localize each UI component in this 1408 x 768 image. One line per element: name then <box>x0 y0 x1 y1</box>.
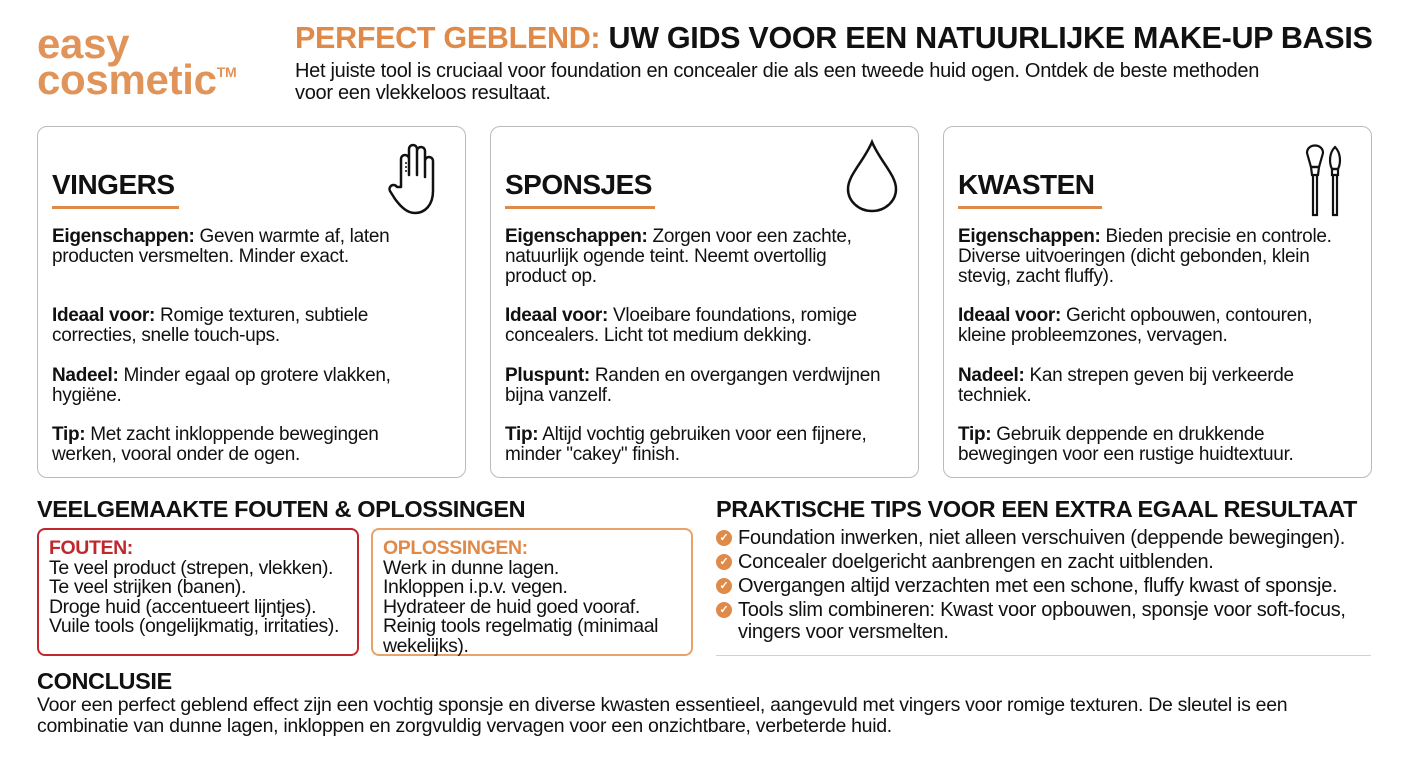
heading: VINGERS <box>52 169 175 200</box>
box: oplossingen: Werk in dunne lagen. <box>383 556 559 578</box>
subtitle <box>295 60 1259 104</box>
heading: KWASTEN <box>958 169 1094 200</box>
logo: easy <box>37 20 129 67</box>
tips list: Foundation inwerken, niet alleen verschuiven (deppende bewegingen). <box>738 527 1345 549</box>
conclusie heading: CONCLUSIE <box>37 668 172 694</box>
tips list: Overgangen altijd verzachten met een schone, fluffy kwast of sponsje. <box>738 575 1337 597</box>
subtitle: Het juiste tool is cruciaal voor foundation en concealer die als een tweede huid ogen. Ontdek de beste methoden <box>295 60 1259 82</box>
box: fouten: Droge huid (accentueert lijntjes). <box>49 596 316 618</box>
panel: sponsjes: Tip: Altijd vochtig gebruiken voor een fijnere, minder "cakey" finish. <box>505 424 867 465</box>
panel: kwasten: Ideaal voor: Gericht opbouwen, contouren, kleine probleemzones, vervagen. <box>958 305 1312 346</box>
box: fouten: Te veel strijken (banen). <box>49 576 246 598</box>
tips list <box>716 527 1346 643</box>
box: oplossingen: Hydrateer de huid goed vooraf. <box>383 596 640 618</box>
conclusie text: Voor een perfect geblend effect zijn een vochtig sponsje en diverse kwasten essentieel, aangevuld met vingers voor romige texturen. De sleutel is een combinatie van dunne lagen, inkloppen en zorgvuldig vervagen voor een onzichtbare, verbeterde huid. <box>37 694 1287 737</box>
icon: drop <box>846 139 898 212</box>
heading: praktische tips: PRAKTISCHE TIPS VOOR EEN EXTRA EGAAL RESULTAAT <box>716 496 1357 522</box>
text: Eigenschappen: Geven warmte af, laten producten versmelten. Minder exact. <box>52 226 389 267</box>
box: fouten: Vuile tools (ongelijkmatig, irritaties). <box>49 615 339 637</box>
box: oplossingen: Inkloppen i.p.v. vegen. <box>383 576 568 598</box>
panel: kwasten <box>943 126 1372 478</box>
panel: kwasten: Tip: Gebruik deppende en drukkende bewegingen voor een rustige huidtextuur. <box>958 424 1294 465</box>
text: Eigenschappen: Zorgen voor een zachte, natuurlijk ogende teint. Neemt overtollig product op. <box>505 226 852 287</box>
title: PERFECT GEBLEND: UW GIDS VOOR EEN NATUURLIJKE MAKE-UP BASIS <box>295 21 1373 55</box>
box: fouten <box>37 528 359 656</box>
panel: vingers: Tip: Met zacht inkloppende bewegingen werken, vooral onder de ogen. <box>52 424 379 465</box>
panel: vingers: Ideaal voor: Romige texturen, subtiele correcties, snelle touch-ups. <box>52 305 368 346</box>
panel: vingers: Nadeel: Minder egaal op grotere vlakken, hygiëne. <box>52 365 391 406</box>
panel: sponsjes: Ideaal voor: Vloeibare foundations, romige concealers. Licht tot medium dekking. <box>505 305 857 346</box>
text: Eigenschappen: Bieden precisie en controle. Diverse uitvoeringen (dicht gebonden, klein stevig, zacht fluffy). <box>958 226 1332 287</box>
panel: kwasten: Nadeel: Kan strepen geven bij verkeerde techniek. <box>958 365 1294 406</box>
logo: cosmeticTM <box>37 56 236 103</box>
box: fouten: FOUTEN: <box>49 537 133 559</box>
icon: hand <box>388 144 434 214</box>
box: oplossingen: OPLOSSINGEN: <box>383 537 528 559</box>
heading: fouten & oplossingen: VEELGEMAAKTE FOUTEN & OPLOSSINGEN <box>37 496 525 522</box>
box: oplossingen: Reinig tools regelmatig (minimaal wekelijks). <box>383 615 658 656</box>
heading: SPONSJES <box>505 169 652 200</box>
box: fouten: Te veel product (strepen, vlekken). <box>49 556 333 578</box>
icon: brushes <box>1306 144 1342 216</box>
logo <box>37 20 236 103</box>
panel: sponsjes <box>490 126 919 478</box>
tips list: Tools slim combineren: Kwast voor opbouwen, sponsje voor soft-focus, vingers voor versmelten. <box>738 599 1346 643</box>
panel: sponsjes: Pluspunt: Randen en overgangen verdwijnen bijna vanzelf. <box>505 365 880 406</box>
box: oplossingen <box>371 528 693 656</box>
panel: vingers <box>37 126 466 478</box>
subtitle: voor een vlekkeloos resultaat. <box>295 82 551 104</box>
tips list: Concealer doelgericht aanbrengen en zacht uitblenden. <box>738 551 1214 573</box>
